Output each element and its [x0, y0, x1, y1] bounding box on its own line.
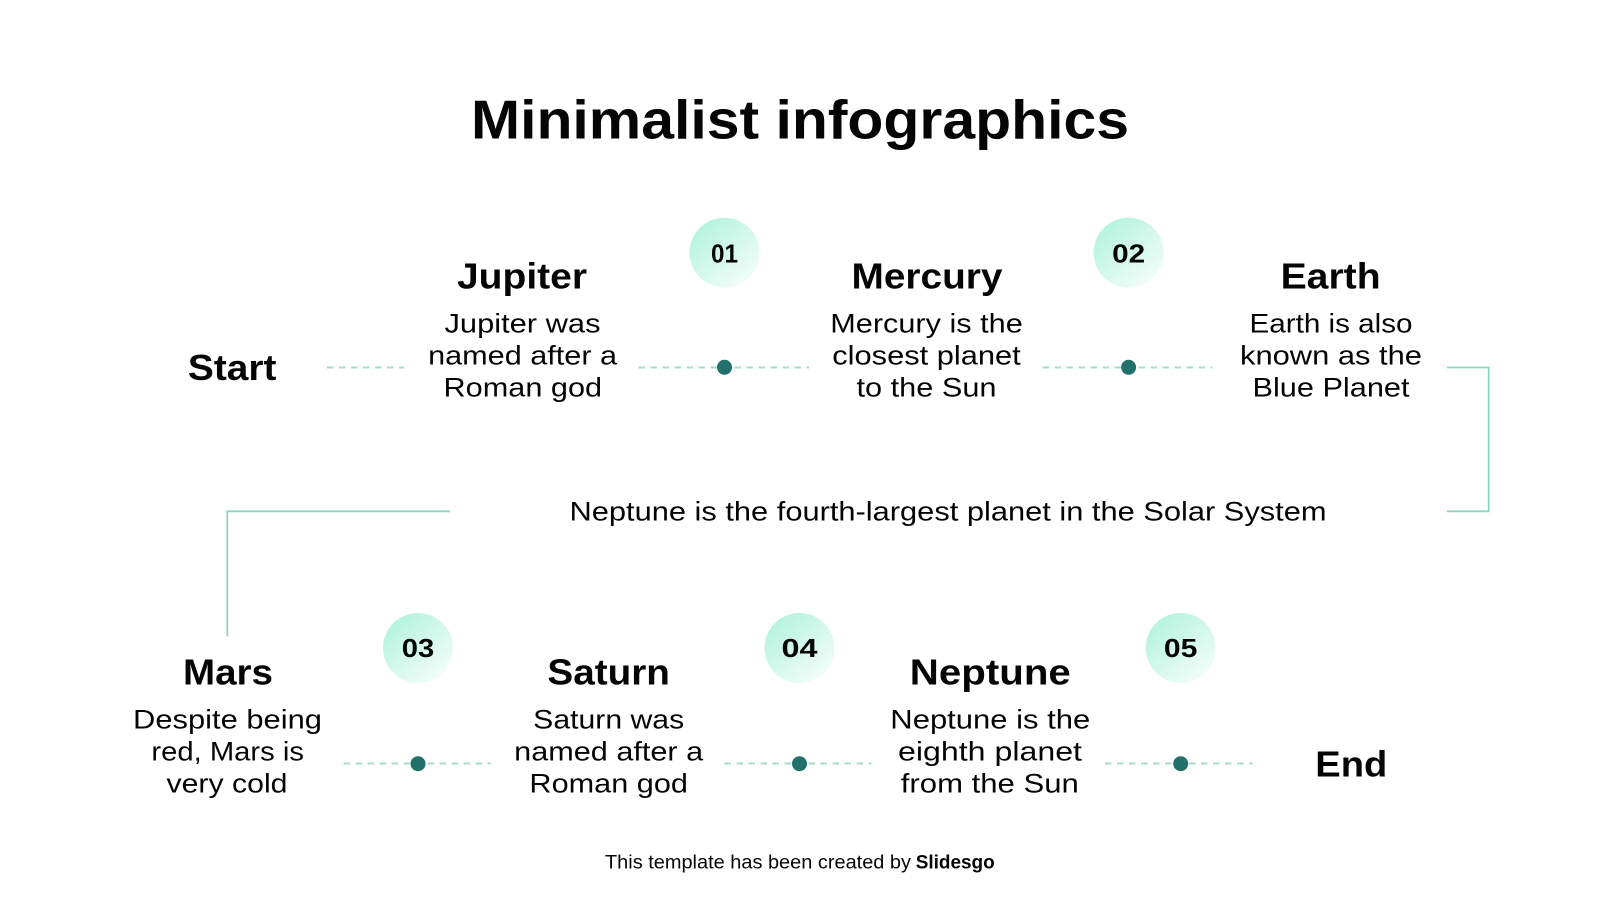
block: Mercury: closest planet: [832, 341, 1021, 371]
badge: 03: [383, 613, 453, 683]
block: Neptune: from the Sun: [901, 768, 1079, 798]
badge: 02: 02: [1112, 238, 1145, 268]
badge: 01: [690, 218, 760, 288]
block: Mars: Despite being: [133, 704, 322, 734]
block: Earth: known as the: [1240, 341, 1422, 371]
block: Jupiter: Jupiter: [457, 255, 587, 296]
connector with dot: 03: [344, 756, 491, 771]
label: Start: Start: [188, 347, 276, 388]
block: Saturn: Saturn was: [533, 704, 684, 734]
block: Earth: Earth: [1281, 255, 1381, 296]
block: Jupiter: Jupiter was: [444, 309, 600, 339]
block: Mercury: Mercury is the: [830, 309, 1023, 339]
badge: 02: [1094, 218, 1164, 288]
connector: start to Jupiter: [327, 366, 404, 368]
block: Mercury: to the Sun: [856, 373, 996, 403]
connector with dot: 01: [638, 360, 809, 375]
badge: 03: 03: [402, 633, 434, 663]
block: Jupiter: [428, 255, 618, 403]
block: Jupiter: Roman god: [444, 373, 602, 403]
block: Neptune: Neptune is the: [890, 704, 1090, 734]
connector with dot: 05: [1105, 756, 1253, 771]
block: Mars: Mars: [183, 651, 273, 692]
footer credit: This template has been created by: [605, 852, 912, 873]
block: Saturn: named after a: [514, 736, 704, 766]
block: Saturn: Saturn: [547, 651, 670, 692]
block: Jupiter: named after a: [428, 341, 618, 371]
center statement: Neptune is the fourth-largest planet in the Solar System: [570, 496, 1326, 526]
badge: 05: [1146, 613, 1216, 683]
block: Earth: Blue Planet: [1252, 373, 1410, 403]
block: Mercury: [830, 255, 1023, 403]
title: Minimalist infographics: [471, 88, 1129, 150]
block: Mars: very cold: [166, 768, 288, 798]
bracket connector: right: [1447, 368, 1489, 511]
badge: 04: 04: [782, 633, 818, 663]
badge: 04: [764, 613, 834, 683]
block: Earth: [1240, 255, 1422, 403]
badge: 01: 01: [711, 238, 738, 268]
bracket connector: left: [227, 511, 450, 636]
block: Saturn: [514, 651, 704, 798]
block: Mars: [133, 651, 322, 798]
block: Mercury: Mercury: [852, 255, 1002, 296]
footer credit: Slidesgo: [916, 852, 995, 873]
block: Saturn: Roman god: [529, 768, 688, 798]
label: End: End: [1315, 744, 1387, 785]
badge: 05: 05: [1164, 633, 1197, 663]
block: Neptune: [890, 651, 1090, 798]
block: Earth: Earth is also: [1250, 309, 1412, 339]
block: Mars: red, Mars is: [151, 736, 304, 766]
block: Neptune: eighth planet: [898, 736, 1083, 766]
connector with dot: 02: [1042, 360, 1212, 375]
block: Neptune: Neptune: [910, 651, 1071, 692]
connector with dot: 04: [724, 756, 872, 771]
